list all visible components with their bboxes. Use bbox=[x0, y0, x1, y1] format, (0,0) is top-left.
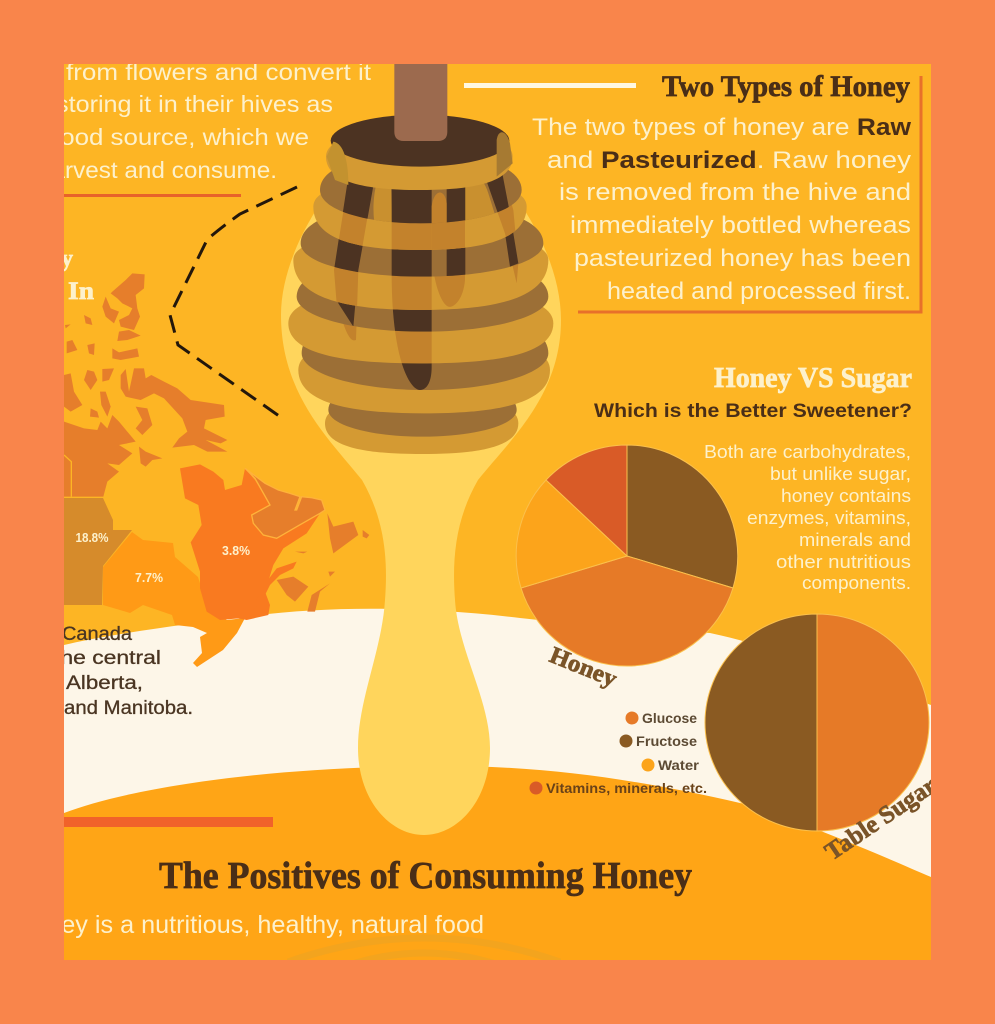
Canada caption bbox=[54, 624, 193, 719]
spoon bbox=[281, 118, 561, 835]
paragraph: The two types of honey are Raw bbox=[532, 114, 911, 141]
comparison paragraph: minerals and bbox=[799, 530, 911, 550]
legend: Glucose bbox=[642, 710, 697, 726]
map of Canada bbox=[64, 273, 369, 667]
section: honey vs sugar bbox=[594, 363, 912, 593]
map heading fragment bbox=[61, 246, 94, 305]
map percentage labels: 7.7% bbox=[135, 571, 163, 585]
paragraph: heated and processed first. bbox=[607, 278, 911, 305]
province: 18.8% region bbox=[64, 498, 132, 605]
panel background bbox=[64, 64, 931, 960]
Atlantic provinces bbox=[277, 513, 369, 612]
comparison paragraph: Both are carbohydrates, bbox=[704, 442, 911, 462]
northern territories and arctic islands bbox=[64, 273, 227, 497]
intro text: from flowers and convert it bbox=[66, 59, 372, 85]
intro orange rule bbox=[64, 194, 241, 197]
heading: Honey VS Sugar bbox=[714, 363, 912, 394]
lower orange area bbox=[64, 766, 931, 960]
label: Honey: Honey bbox=[546, 642, 620, 693]
pie chart: honey bbox=[516, 445, 738, 666]
map heading fragment: y bbox=[61, 246, 73, 272]
paragraph: pasteurized honey has been bbox=[574, 245, 911, 272]
province: Ontario bbox=[103, 532, 245, 667]
cream wave band bbox=[64, 609, 931, 880]
heading: Two Types of Honey bbox=[662, 70, 910, 103]
paragraph: is removed from the hive and bbox=[559, 179, 911, 206]
intro text: food source, which we bbox=[53, 124, 309, 150]
white rule bbox=[464, 83, 636, 88]
comparison paragraph: other nutritious bbox=[776, 552, 911, 572]
intro text: harvest and consume. bbox=[38, 157, 277, 183]
infographic canvas bbox=[64, 64, 931, 960]
legend bbox=[530, 710, 707, 796]
map percentage labels: 3.8% bbox=[222, 544, 250, 558]
pie chart: table sugar bbox=[705, 614, 929, 831]
Canada caption: and Manitoba. bbox=[64, 698, 193, 719]
bottom orange rule bbox=[64, 817, 273, 827]
heading: positives of consuming honey: The Positives of Consuming Honey bbox=[159, 855, 692, 897]
legend: Fructose bbox=[636, 733, 697, 749]
orange corner frame bbox=[578, 76, 921, 312]
legend: Vitamins, minerals, etc. bbox=[546, 780, 707, 796]
map percentage labels bbox=[76, 531, 250, 585]
dashed connector bbox=[170, 187, 297, 418]
positives text: Honey is a nutritious, healthy, natural food bbox=[15, 911, 484, 939]
dipper handle bbox=[394, 60, 447, 141]
comparison paragraph: components. bbox=[802, 573, 911, 593]
legend: Water bbox=[658, 757, 700, 773]
section: two types of honey bbox=[464, 70, 921, 312]
paragraph: immediately bottled whereas bbox=[570, 212, 911, 239]
comparison paragraph bbox=[704, 442, 911, 593]
Canada caption: Canada bbox=[62, 624, 132, 645]
comparison paragraph: enzymes, vitamins, bbox=[747, 508, 911, 528]
faint honey ripple arcs bbox=[288, 938, 560, 972]
paragraph: and Pasteurized . Raw honey bbox=[547, 147, 911, 174]
eastern provinces bbox=[180, 464, 369, 620]
honeycomb dipper head bbox=[288, 60, 553, 454]
label: Table Sugar: Table Sugar bbox=[820, 772, 941, 866]
map percentage labels: 18.8% bbox=[76, 531, 108, 545]
subheading: Which is the Better Sweetener? bbox=[594, 401, 912, 422]
map heading fragment: In bbox=[68, 278, 94, 305]
province: Labrador bbox=[245, 468, 325, 538]
paragraph bbox=[532, 114, 911, 305]
Canada caption: Alberta, bbox=[66, 673, 143, 694]
province: Quebec bbox=[180, 464, 320, 620]
intro text bbox=[38, 59, 372, 183]
Canada caption: the central bbox=[54, 648, 161, 669]
intro text: storing it in their hives as bbox=[56, 91, 333, 117]
comparison paragraph: honey contains bbox=[781, 486, 911, 506]
Gaspe strip bbox=[252, 562, 297, 610]
comparison paragraph: but unlike sugar, bbox=[770, 464, 911, 484]
